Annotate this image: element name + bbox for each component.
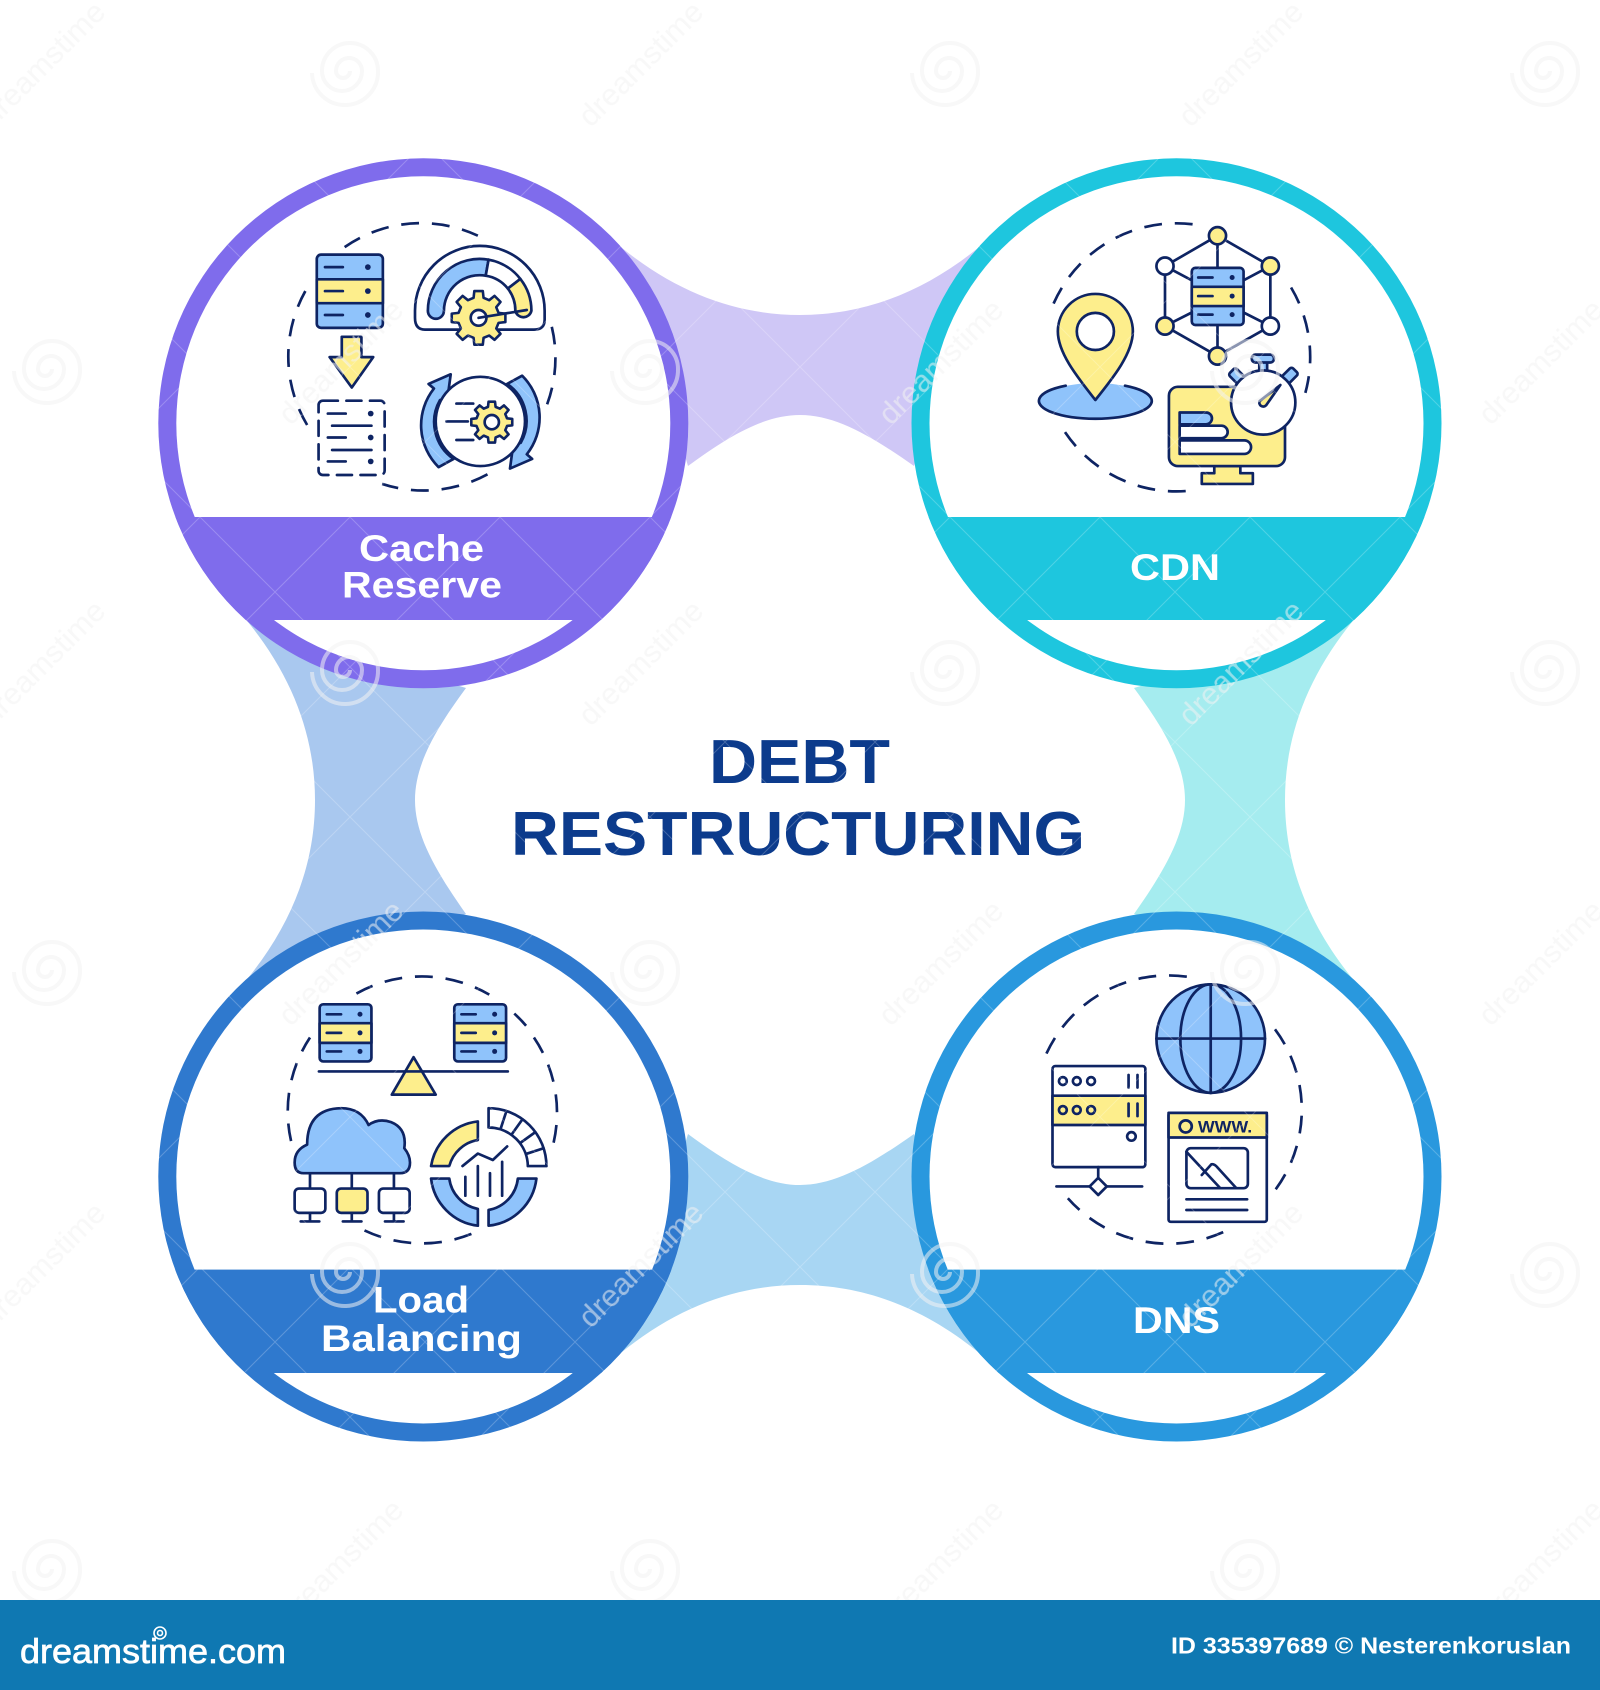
- panel: DNS: [900, 912, 1460, 1442]
- watermark: diagonal text: dreamstime: [1171, 1195, 1310, 1334]
- panel: Load Balancing: [150, 912, 710, 1442]
- icon: CDN: [1039, 223, 1310, 491]
- watermark: diagonal text: dreamstime: [271, 1492, 410, 1631]
- watermark: diagonal text: dreamstime: [871, 893, 1010, 1032]
- footer logo spiral: [154, 1627, 166, 1639]
- panel: CDN: [900, 158, 1460, 688]
- icon: load balancing: [288, 976, 557, 1243]
- icon: DNS: [1046, 975, 1302, 1244]
- icon: cache reserve: [288, 223, 555, 491]
- label: Load Balancing: Balancing: [321, 1318, 522, 1359]
- label: Load Balancing: Load: [373, 1280, 469, 1320]
- footer bar: [0, 1600, 1600, 1690]
- connector: left blue: [248, 622, 466, 978]
- title: [511, 728, 1085, 869]
- footer logo text: dreamstime.com: [20, 1633, 286, 1671]
- connector: bottom light blue: [622, 1134, 978, 1352]
- label: DNS: DNS: [1133, 1300, 1220, 1341]
- label: Cache Reserve: Cache: [359, 528, 484, 569]
- watermark: diagonal text: dreamstime: [871, 1492, 1010, 1631]
- watermark: diagonal text: dreamstime: [271, 292, 410, 431]
- watermark: diagonal text: dreamstime: [571, 593, 710, 732]
- title: RESTRUCTURING: [511, 800, 1085, 869]
- label: Load Balancing: [321, 1280, 522, 1359]
- connector: right cyan: [1134, 622, 1352, 978]
- label: CDN: CDN: [1130, 547, 1220, 588]
- panel: Cache Reserve: [150, 158, 710, 688]
- watermark: diagonal text: dreamstime: [1171, 593, 1310, 732]
- watermark: diagonal text: dreamstime: [871, 292, 1010, 431]
- label: Cache Reserve: [342, 528, 502, 606]
- label: Cache Reserve: Reserve: [342, 564, 502, 606]
- watermark: diagonal text: dreamstime: [271, 893, 410, 1032]
- icon: DNS: WWW.: [1198, 1118, 1252, 1136]
- connector: top purple: [622, 248, 978, 466]
- watermark: diagonal text: dreamstime: [571, 1195, 710, 1334]
- title: DEBT: [709, 728, 890, 797]
- footer credit: ID 335397689 © Nesterenkoruslan: [1171, 1632, 1571, 1658]
